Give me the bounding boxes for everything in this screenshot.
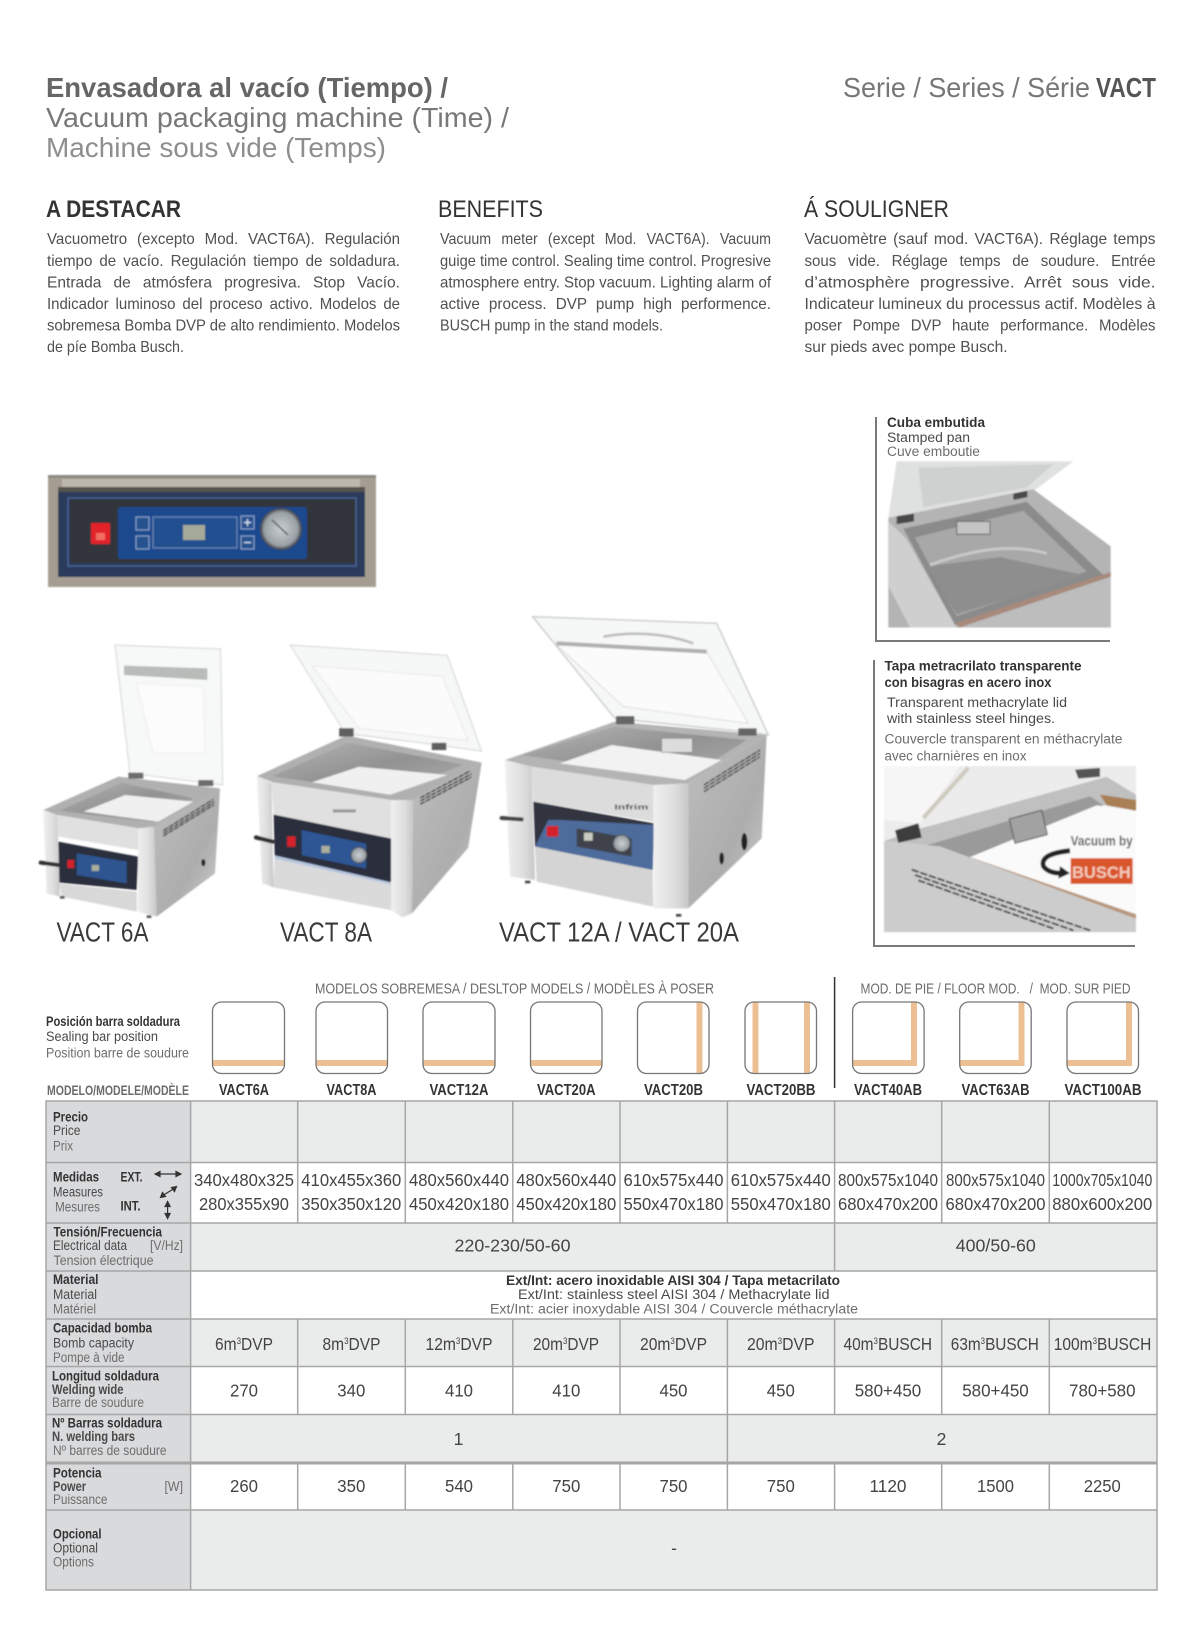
label: sealing bar position: [46, 1014, 189, 1060]
row: material: Material: [53, 1287, 97, 1302]
row: welding width: 580+450: [855, 1381, 922, 1401]
row: power: 260: [230, 1476, 258, 1496]
detail panel: stamped pan: Stamped pan: [887, 430, 970, 445]
row: pump capacity: 63m: [951, 1334, 985, 1354]
row: options: [53, 1527, 677, 1570]
detail panel: transparent lid: avec charnières en inox: [884, 749, 1027, 764]
photo: transparent lid: Vacuum by: [1071, 832, 1133, 849]
row: pump capacity: BUSCH: [1097, 1334, 1151, 1354]
row: measures: 480x560x440: [409, 1170, 509, 1190]
row: electrical data: Tensión/Frecuencia: [54, 1225, 162, 1240]
text block: A destacar: Indicador luminoso del proceso activo. Modelos de: [47, 296, 400, 313]
row: electrical data: [V/Hz]: [150, 1238, 183, 1253]
text block: A destacar: sobremesa Bomba DVP de alto rendimiento. Modelos: [47, 318, 400, 334]
label: sealing bar position: Posición barra soldadura: [46, 1014, 180, 1029]
sealing bar icons: [212, 1002, 1138, 1074]
row: pump capacity: 20m: [747, 1334, 781, 1354]
icon: VACT20A bar: [530, 1002, 602, 1074]
row: pump capacity: Capacidad bomba: [53, 1321, 152, 1336]
text block: A destacar: Entrada de atmósfera progresiva. Stop Vacío.: [47, 274, 400, 292]
row: welding width: 410: [552, 1381, 581, 1401]
text block: a souligner: poser Pompe DVP haute performance. Modèles: [804, 318, 1156, 334]
row: power: 750: [660, 1476, 688, 1496]
row: pump capacity: 3: [981, 1336, 985, 1346]
row: measures: 350x350x120: [301, 1194, 402, 1214]
row: pump capacity: DVP: [241, 1334, 273, 1354]
series label: VACT: [1096, 72, 1156, 103]
row: power: Power: [53, 1479, 87, 1494]
row: measures: 410x455x360: [301, 1170, 402, 1190]
text block: benefits: guige time control. Sealing time control. Progresive: [440, 253, 771, 270]
row: welding bars: 2: [937, 1429, 946, 1449]
row: welding bars: Nº Barras soldadura: [52, 1416, 162, 1431]
text block: A destacar: tiempo de vacío. Regulación tiempo de soldadura.: [47, 253, 400, 270]
row: welding bars: Nº barres de soudure: [53, 1443, 166, 1458]
model header row: [47, 1082, 1142, 1099]
caption: VACT 8A: VACT 8A: [280, 916, 372, 948]
model header row: VACT12A: [430, 1082, 488, 1099]
row: pump capacity: 3: [237, 1336, 241, 1346]
row: measures: 610x575x440: [731, 1170, 831, 1190]
row: pump capacity: DVP: [349, 1334, 380, 1354]
icon: VACT100AB bars: [1067, 1002, 1138, 1074]
caption: VACT 12A / VACT 20A: VACT 12A / VACT 20A: [499, 916, 739, 948]
model header row: MODELO/MODELE/MODÈLE: [47, 1082, 189, 1098]
icon: VACT20BB bars: [745, 1002, 816, 1074]
row: pump capacity: 6m: [215, 1334, 239, 1354]
row: pump capacity: 40m: [844, 1334, 878, 1354]
row: power: 350: [337, 1476, 366, 1496]
row: material: [53, 1272, 858, 1317]
row: pump capacity: 3: [670, 1336, 675, 1346]
row: measures: 480x560x440: [516, 1170, 617, 1190]
icon: VACT40AB bars: [853, 1002, 924, 1074]
photo: transparent lid: [884, 766, 1136, 932]
row: power: [53, 1466, 1121, 1507]
detail panel: transparent lid: with stainless steel hinges.: [886, 711, 1055, 726]
row: welding width: 450: [767, 1381, 795, 1401]
row: measures: 550x470x180: [624, 1194, 724, 1214]
row: options: -: [671, 1538, 677, 1558]
title: [46, 72, 509, 163]
text block: a souligner: Vacuomètre (sauf mod. VACT6A). Réglage temps: [804, 231, 1156, 248]
row: pump capacity: 3: [456, 1336, 460, 1346]
series label: Serie / Series / Série: [843, 72, 1090, 103]
row: price: Precio: [53, 1110, 88, 1125]
row: welding width: 410: [445, 1381, 473, 1401]
text block: benefits: active process. DVP pump high performence.: [440, 296, 771, 313]
row: power: Potencia: [53, 1466, 102, 1481]
model header row: VACT63AB: [962, 1082, 1030, 1099]
group heading: desktop models: MODELOS SOBREMESA / DESLTOP MODELS / MODÈLES À POSER: [315, 980, 714, 998]
row: welding width: [52, 1369, 1136, 1410]
icon: VACT6A bar: [212, 1002, 284, 1074]
row: measures: Mesures: [55, 1200, 100, 1215]
icon: VACT12A bar: [423, 1002, 495, 1074]
icon: VACT20B bar: [638, 1002, 709, 1074]
text block: benefits: BUSCH pump in the stand models.: [440, 318, 663, 334]
row: electrical data: [53, 1225, 1036, 1268]
row: welding bars: 1: [454, 1429, 463, 1449]
row: measures: EXT.: [120, 1170, 142, 1185]
row: pump capacity: 20m: [533, 1334, 567, 1354]
model header row: VACT20BB: [746, 1082, 816, 1099]
text block: benefits: BENEFITS: [438, 196, 543, 223]
model header row: VACT6A: [219, 1082, 269, 1099]
table grid: [46, 1101, 1157, 1590]
row: pump capacity: 8m: [322, 1334, 347, 1354]
row: price: Price: [53, 1123, 80, 1138]
icon: dimension arrows: [155, 1172, 181, 1218]
row: measures: 680x470x200: [946, 1194, 1046, 1214]
machine: VACT 6A: [41, 645, 223, 918]
row: welding width: 270: [230, 1381, 258, 1401]
label: sealing bar position: Sealing bar position: [46, 1029, 158, 1044]
detail panel: transparent lid: con bisagras en acero inox: [884, 675, 1052, 690]
group heading: floor models: MOD. DE PIE / FLOOR MOD. / MOD. SUR PIED: [860, 980, 1131, 998]
detail panel: stamped pan: [876, 415, 1111, 641]
row: pump capacity: 20m: [640, 1334, 674, 1354]
text block: a souligner: [804, 196, 1156, 356]
model header row: VACT100AB: [1064, 1082, 1142, 1099]
title: Machine sous vide (Temps): [46, 132, 386, 163]
row: welding bars: N. welding bars: [52, 1429, 135, 1444]
detail panel: transparent lid: Couvercle transparent en méthacrylate: [884, 732, 1122, 747]
row: power: 540: [445, 1476, 473, 1496]
row: measures: 450x420x180: [409, 1194, 509, 1214]
row: measures: 280x355x90: [199, 1194, 289, 1214]
row: material: Ext/Int: acero inoxidable AISI 304 / Tapa metacrilato: [506, 1273, 840, 1288]
row: electrical data: 400/50-60: [956, 1236, 1036, 1256]
text block: A destacar: [46, 196, 400, 356]
row: pump capacity: Bomb capacity: [53, 1335, 134, 1350]
machine: VACT 12A / 20A: [502, 617, 768, 917]
row: power: 750: [767, 1476, 795, 1496]
row: power: 2250: [1084, 1476, 1121, 1496]
row: options: Opcional: [53, 1527, 102, 1542]
row: material: Matériel: [53, 1302, 96, 1317]
row: welding width: Barre de soudure: [52, 1395, 144, 1410]
row: pump capacity: 3: [344, 1336, 349, 1346]
row: options: Optional: [53, 1541, 98, 1556]
row: pump capacity: BUSCH: [878, 1334, 932, 1354]
text block: A destacar: A DESTACAR: [46, 196, 181, 223]
row: welding width: 580+450: [962, 1381, 1029, 1401]
row: pump capacity: [53, 1321, 1151, 1365]
row: welding bars: [52, 1416, 946, 1458]
photo: stamped pan: [888, 461, 1111, 627]
row: welding width: Welding wide: [52, 1382, 124, 1397]
row: pump capacity: DVP: [782, 1334, 814, 1354]
row: measures: 1000x705x1040: [1052, 1170, 1153, 1190]
text block: a souligner: Á SOULIGNER: [804, 196, 949, 223]
machine: VACT 12A / 20A: Infrim: [614, 802, 649, 811]
row: pump capacity: DVP: [567, 1334, 599, 1354]
detail panel: stamped pan: Cuba embutida: [887, 415, 985, 430]
row: measures: [53, 1170, 1153, 1218]
row: measures: 800x575x1040: [838, 1170, 938, 1190]
row: welding width: 450: [660, 1381, 688, 1401]
row: measures: 680x470x200: [838, 1194, 938, 1214]
caption: VACT 6A: VACT 6A: [56, 916, 149, 948]
row: material: Material: [53, 1272, 98, 1287]
icon: VACT8A bar: [316, 1002, 388, 1074]
row: electrical data: Tension électrique: [54, 1253, 154, 1268]
text block: benefits: Vacuum meter (except Mod. VACT6A). Vacuum: [440, 231, 771, 248]
text block: a souligner: d’atmosphère progressive. Arrêt sous vide.: [804, 274, 1156, 292]
row: material: Ext/Int: acier inoxydable AISI 304 / Couvercle méthacrylate: [490, 1302, 858, 1317]
machine: VACT 8A: [256, 645, 482, 918]
text block: a souligner: sur pieds avec pompe Busch.: [804, 339, 1008, 356]
model header row: VACT40AB: [854, 1082, 922, 1099]
label: sealing bar position: Position barre de soudure: [46, 1046, 189, 1060]
row: power: [W]: [164, 1479, 183, 1494]
specifications table: [46, 1101, 1157, 1590]
detail panel: stamped pan: Cuve emboutie: [887, 444, 980, 459]
row: pump capacity: 3: [563, 1336, 567, 1346]
row: options: Options: [53, 1555, 94, 1570]
row: measures: INT.: [120, 1198, 140, 1214]
row: welding width: 340: [337, 1381, 366, 1401]
row: measures: 610x575x440: [624, 1170, 724, 1190]
row: pump capacity: 100m: [1054, 1334, 1098, 1354]
row: measures: Medidas: [53, 1170, 99, 1185]
row: measures: 450x420x180: [516, 1194, 617, 1214]
model header row: VACT20B: [644, 1082, 703, 1099]
row: measures: 880x600x200: [1052, 1194, 1153, 1214]
text block: a souligner: sous vide. Réglage temps de soudure. Entrée: [804, 253, 1156, 270]
text block: A destacar: Vacuometro (excepto Mod. VACT6A). Regulación: [47, 231, 400, 248]
row: pump capacity: 3: [1093, 1336, 1097, 1346]
row: measures: 800x575x1040: [946, 1170, 1045, 1190]
row: pump capacity: 3: [874, 1336, 878, 1346]
row: measures: Measures: [53, 1185, 103, 1200]
row: material: Ext/Int: stainless steel AISI 304 / Methacrylate lid: [518, 1287, 830, 1302]
row: pump capacity: 3: [778, 1336, 782, 1346]
table backgrounds: [46, 1101, 1157, 1590]
row: power: 750: [552, 1476, 581, 1496]
row: measures: 550x470x180: [731, 1194, 831, 1214]
row: welding width: 780+580: [1069, 1381, 1136, 1401]
icon: VACT63AB bars: [960, 1002, 1031, 1074]
row: welding width: Longitud soldadura: [52, 1369, 159, 1384]
row: pump capacity: 12m: [426, 1334, 460, 1354]
text block: benefits: [438, 196, 772, 334]
row: electrical data: 220-230/50-60: [454, 1236, 571, 1256]
row: pump capacity: DVP: [460, 1334, 492, 1354]
text block: A destacar: de píe Bomba Busch.: [47, 339, 184, 356]
row: price: [53, 1110, 88, 1154]
row: price: Prix: [53, 1139, 73, 1154]
row: power: 1120: [870, 1476, 907, 1496]
row: pump capacity: Pompe à vide: [53, 1350, 124, 1365]
detail panel: transparent lid: [874, 659, 1136, 946]
text block: a souligner: Indicateur lumineux du processus actif. Modèles à: [804, 296, 1156, 313]
photo: control panel: [48, 475, 376, 587]
row: measures: 340x480x325: [194, 1170, 294, 1190]
row: electrical data: Electrical data: [53, 1238, 127, 1253]
row: pump capacity: DVP: [675, 1334, 707, 1354]
model header row: VACT8A: [326, 1082, 376, 1099]
row: power: Puissance: [53, 1492, 108, 1507]
photo: transparent lid: BUSCH: [1072, 864, 1131, 882]
row: power: 1500: [977, 1476, 1014, 1496]
detail panel: transparent lid: Transparent methacrylate lid: [887, 695, 1067, 710]
title: Envasadora al vacío (Tiempo) /: [46, 72, 448, 103]
model header row: VACT20A: [537, 1082, 596, 1099]
detail panel: transparent lid: Tapa metracrilato transparente: [884, 659, 1082, 674]
row: pump capacity: BUSCH: [985, 1334, 1039, 1354]
title: Vacuum packaging machine (Time) /: [46, 102, 509, 133]
text block: benefits: atmosphere entry. Stop vacuum. Lighting alarm of: [440, 274, 772, 292]
